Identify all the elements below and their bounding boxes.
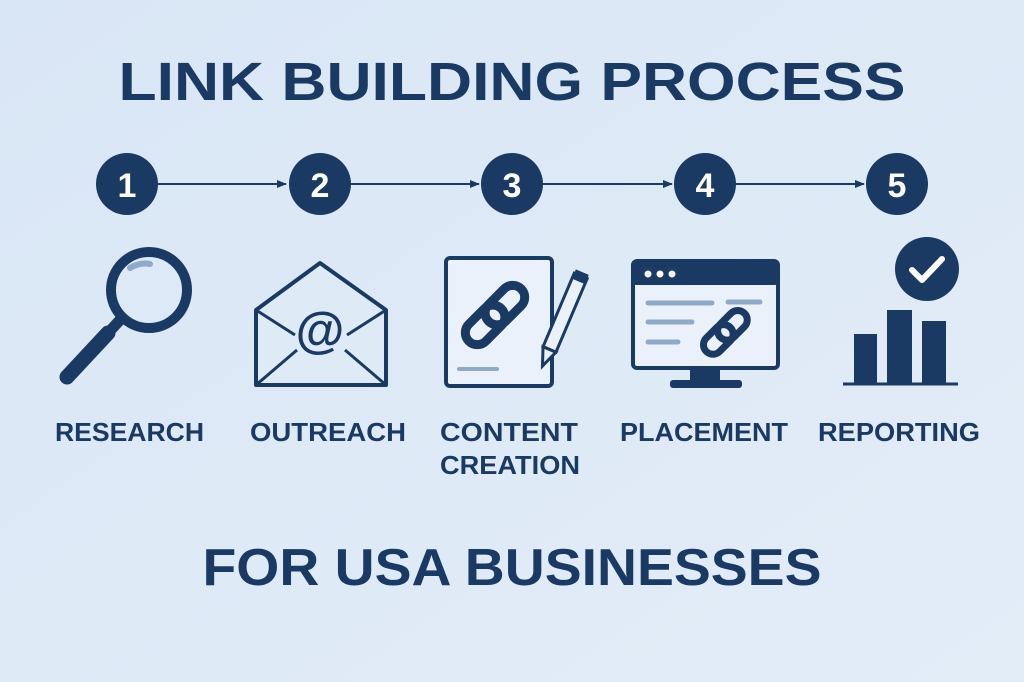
arrow: 4 to 5 <box>736 183 864 185</box>
subtitle: FOR USA BUSINESSES <box>202 539 822 597</box>
step 2 <box>289 153 351 215</box>
labels <box>55 417 980 480</box>
icon: envelope with @ <box>256 263 386 385</box>
label: reporting: REPORTING <box>818 417 980 447</box>
icon: bar chart with check <box>843 237 959 384</box>
step 5 <box>866 153 928 215</box>
label: content creation: CONTENT <box>440 417 578 447</box>
icon: monitor with link <box>633 261 778 388</box>
arrow: 3 to 4 <box>543 183 672 185</box>
step 5: 5 <box>888 167 906 205</box>
icon: document with link and pencil <box>446 258 589 386</box>
label: content creation: CREATION <box>440 450 580 480</box>
step 3 <box>481 153 543 215</box>
label: research: RESEARCH <box>55 417 204 447</box>
step 3: 3 <box>503 167 521 205</box>
step 4 <box>674 153 736 215</box>
title: LINK BUILDING PROCESS <box>118 52 906 112</box>
step 2: 2 <box>311 167 329 205</box>
icon: envelope with @: @ <box>296 302 344 358</box>
arrow: 2 to 3 <box>351 183 479 185</box>
icon: magnifying glass <box>67 252 187 377</box>
label: placement: PLACEMENT <box>620 417 788 447</box>
step 1: 1 <box>118 167 136 205</box>
step numbers timeline <box>96 153 928 215</box>
label: content creation <box>440 417 580 480</box>
label: outreach: OUTREACH <box>250 417 406 447</box>
arrow: 1 to 2 <box>158 183 286 185</box>
step 1 <box>96 153 158 215</box>
step 4: 4 <box>696 167 715 205</box>
